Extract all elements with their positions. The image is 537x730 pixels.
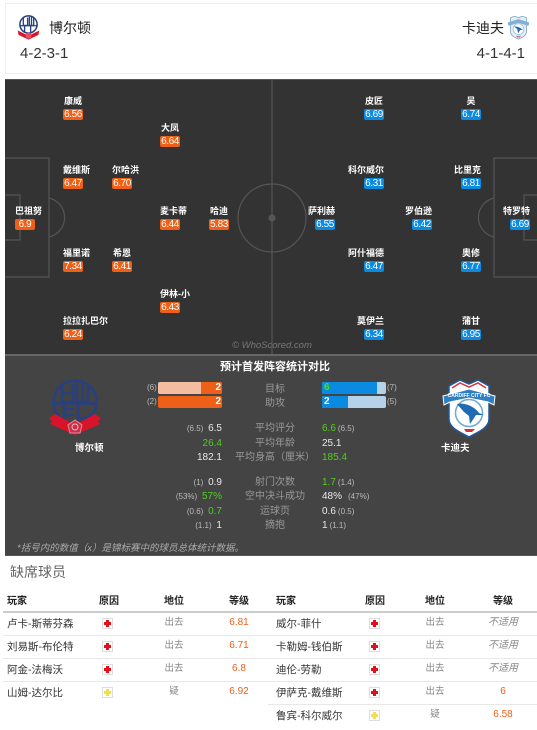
row: 卢卡-斯蒂芬森: 卢卡-斯蒂芬森 — [7, 618, 74, 630]
bar totals: (5) — [387, 397, 397, 406]
row: 卢卡-斯蒂芬森: 6.81 — [229, 617, 249, 628]
player: 哈迪 — [209, 206, 229, 230]
player: 吴 — [461, 96, 481, 120]
player: 特罗特: 6.69 — [511, 219, 529, 230]
label: 空中决斗成功: 空中决斗成功 — [245, 491, 305, 502]
player: 阿什福德 — [348, 248, 384, 272]
panel: match header — [5, 3, 537, 74]
player: 大凤: 6.64 — [161, 136, 179, 147]
header: rating: 等级 — [229, 596, 249, 607]
row: 迪伦-劳勒: 不适用 — [488, 663, 518, 674]
player: 莫伊兰: 莫伊兰 — [357, 316, 384, 326]
player: 罗伯逊: 罗伯逊 — [405, 206, 432, 216]
label: 助攻: 助攻 — [265, 398, 285, 409]
stats heading: 预计首发阵容统计对比 — [220, 361, 330, 373]
player: 罗伯逊: 6.42 — [413, 219, 431, 230]
row: 卡勒姆-钱伯斯: 不适用 — [488, 640, 518, 651]
header: player: 玩家 — [276, 596, 296, 607]
player: 特罗特 — [503, 206, 530, 230]
bar totals: (2) — [147, 397, 157, 406]
player: 皮匠: 6.69 — [365, 109, 383, 120]
value: height: 185.4 — [322, 452, 347, 463]
player: 戴维斯: 戴维斯 — [63, 165, 90, 175]
player: 蒲甘: 蒲甘 — [462, 316, 480, 326]
header: status: 地位 — [425, 596, 445, 607]
label: 运球页: 运球页 — [260, 506, 290, 517]
player: 希恩 — [112, 248, 132, 272]
bar: Bolton assists — [158, 396, 222, 408]
row: 刘易斯-布伦特: 刘易斯-布伦特 — [7, 641, 74, 653]
value: tackles: 1(1.1) — [322, 520, 346, 531]
player: 阿什福德: 6.47 — [365, 261, 383, 272]
player: 比里克: 6.81 — [462, 178, 480, 189]
bar fill — [322, 396, 348, 408]
row: 刘易斯-布伦特: 出去 — [164, 640, 184, 651]
row: 鲁宾-科尔威尔: 6.58 — [493, 709, 513, 720]
value: aerial: 48% (47%) — [322, 491, 369, 502]
row: 卡勒姆-钱伯斯 — [268, 640, 537, 658]
bar totals: (7) — [387, 383, 397, 392]
value: age: 26.4 — [203, 438, 222, 449]
player: 巴祖努 — [15, 206, 42, 230]
player: 大凤: 大凤 — [161, 123, 179, 133]
player: 奥修: 6.77 — [462, 261, 480, 272]
section heading: missing players: 缺席球员 — [10, 564, 66, 580]
player: 萨利赫 — [308, 206, 335, 230]
row: 威尔-菲什: 不适用 — [488, 617, 518, 628]
bar fill — [322, 382, 377, 394]
team name: Cardiff: 卡迪夫 — [462, 20, 504, 36]
icon: Bolton crest large — [49, 379, 101, 435]
player: 麦卡蒂: 6.44 — [161, 219, 179, 230]
player: 戴维斯: 6.47 — [64, 178, 82, 189]
row: 鲁宾-科尔威尔: 疑 — [430, 709, 440, 720]
row: 伊萨克-戴维斯: 6 — [500, 686, 506, 697]
player: 萨利赫: 6.55 — [316, 219, 334, 230]
formation: Bolton: 4-2-3-1 — [20, 45, 68, 62]
Bolton name: 博尔顿 — [75, 443, 104, 454]
player: 吴: 6.74 — [462, 109, 480, 120]
label: 摘抱: 摘抱 — [265, 520, 285, 531]
player: 特罗特: 特罗特 — [503, 206, 530, 216]
player: 尔哈洪 — [112, 165, 139, 189]
player: 巴祖努: 6.9 — [19, 219, 31, 230]
Bolton stat values — [176, 423, 222, 531]
header: player: 玩家 — [7, 596, 27, 607]
table: Bolton missing players — [0, 0, 268, 730]
row: 迪伦-劳勒: 迪伦-劳勒 — [276, 664, 322, 676]
player: 莫伊兰: 6.34 — [365, 329, 383, 340]
player: 麦卡蒂: 麦卡蒂 — [160, 206, 187, 216]
player: 尔哈洪: 尔哈洪 — [112, 165, 139, 175]
label: 平均年龄: 平均年龄 — [255, 438, 295, 449]
row: 威尔-菲什 — [268, 617, 537, 635]
row: 山姆-达尔比: 山姆-达尔比 — [7, 687, 63, 699]
icon: Bolton crest small — [18, 15, 40, 40]
bar totals: (6) — [147, 383, 157, 392]
player: 比里克 — [454, 165, 481, 189]
panel: pitch — [5, 79, 537, 354]
stat labels — [235, 383, 315, 531]
player: 科尔威尔: 6.31 — [365, 178, 383, 189]
value: shots: 1.7(1.4) — [322, 477, 354, 488]
row: 山姆-达尔比: 疑 — [169, 686, 179, 697]
row: 迪伦-劳勒 — [268, 663, 537, 681]
player: 尔哈洪: 6.70 — [113, 178, 131, 189]
player: 福里诺 — [63, 248, 90, 272]
player: 蒲甘: 6.95 — [462, 329, 480, 340]
watermark: © WhoScored.com — [232, 340, 312, 351]
player: 莫伊兰 — [357, 316, 384, 340]
players: Bolton — [15, 96, 229, 340]
value: aerial: (53%) 57% — [176, 491, 222, 502]
header: reason: 原因 — [99, 596, 119, 607]
footnote: *括号内的数值（x）是锦标赛中的球员总体统计数据。 — [17, 543, 244, 554]
header: status: 地位 — [164, 596, 184, 607]
formation: Cardiff: 4-1-4-1 — [477, 45, 525, 62]
players: Cardiff — [308, 96, 530, 340]
label: 平均身高: 平均身高（厘米） — [235, 452, 315, 463]
Cardiff name: 卡迪夫 — [441, 443, 470, 454]
row: 刘易斯-布伦特 — [0, 640, 268, 658]
player: 福里诺: 7.34 — [64, 261, 82, 272]
team name: Bolton: 博尔顿 — [49, 20, 91, 36]
value: age: 25.1 — [322, 438, 341, 449]
player: 阿什福德: 阿什福德 — [348, 248, 384, 258]
row: 阿金-法梅沃 — [0, 663, 268, 681]
row: 卡勒姆-钱伯斯: 出去 — [425, 640, 445, 651]
player: 科尔威尔: 科尔威尔 — [348, 165, 384, 175]
player: 皮匠: 皮匠 — [365, 96, 383, 106]
player: 康威: 6.56 — [64, 109, 82, 120]
table: Cardiff missing players — [268, 0, 537, 730]
player: 比里克: 比里克 — [454, 165, 481, 175]
player: 皮匠 — [364, 96, 384, 120]
player: 康威 — [63, 96, 83, 120]
player: 伊林-小: 6.43 — [161, 302, 179, 313]
player: 哈迪: 5.83 — [210, 219, 228, 230]
value: shots: (1) 0.9 — [194, 477, 222, 488]
player: 戴维斯 — [63, 165, 90, 189]
value: height: 182.1 — [197, 452, 222, 463]
row: 鲁宾-科尔威尔: 鲁宾-科尔威尔 — [276, 710, 342, 722]
row: 山姆-达尔比: 6.92 — [229, 686, 249, 697]
label: 目标: 目标 — [265, 384, 285, 395]
icon: Cardiff crest small — [508, 16, 530, 40]
player: 福里诺: 福里诺 — [63, 248, 90, 258]
player: 拉拉扎巴尔: 6.24 — [64, 329, 82, 340]
row: 卢卡-斯蒂芬森: 出去 — [164, 617, 184, 628]
row: 阿金-法梅沃: 6.8 — [232, 663, 246, 674]
Cardiff stat values — [322, 423, 369, 531]
row: 卡勒姆-钱伯斯: 卡勒姆-钱伯斯 — [276, 641, 342, 653]
bar fill: 6 — [324, 382, 330, 393]
player: 大凤 — [160, 123, 180, 147]
bar totals — [147, 383, 397, 406]
panel: lineup stats comparison — [5, 354, 537, 556]
player: 麦卡蒂 — [160, 206, 187, 230]
player: 康威: 康威 — [64, 96, 82, 106]
value: rating: 6.6(6.5) — [322, 423, 354, 434]
player: 拉拉扎巴尔: 拉拉扎巴尔 — [63, 316, 108, 326]
row: 迪伦-劳勒: 出去 — [425, 663, 445, 674]
label: 射门次数: 射门次数 — [255, 477, 295, 488]
row: 伊萨克-戴维斯: 伊萨克-戴维斯 — [276, 687, 342, 699]
bar: Bolton assists: 2 — [215, 396, 221, 407]
row: 伊萨克-戴维斯: 出去 — [425, 686, 445, 697]
row: 威尔-菲什: 出去 — [425, 617, 445, 628]
player: 巴祖努: 巴祖努 — [15, 206, 42, 216]
row: 阿金-法梅沃: 阿金-法梅沃 — [7, 664, 63, 676]
player: 伊林-小: 伊林-小 — [160, 289, 190, 299]
icon: Cardiff crest large — [442, 379, 496, 438]
row: 鲁宾-科尔威尔 — [268, 709, 537, 727]
icon: Cardiff crest large: CARDIFF CITY FC — [448, 393, 491, 399]
row: 阿金-法梅沃: 出去 — [164, 663, 184, 674]
player: 拉拉扎巴尔 — [63, 316, 108, 340]
row: 威尔-菲什: 威尔-菲什 — [276, 618, 322, 630]
player: 奥修 — [461, 248, 481, 272]
row: 刘易斯-布伦特: 6.71 — [229, 640, 249, 651]
player: 蒲甘 — [461, 316, 481, 340]
player: 伊林-小 — [160, 289, 190, 313]
player: 希恩: 6.41 — [113, 261, 131, 272]
row: 伊萨克-戴维斯 — [268, 686, 537, 704]
player: 科尔威尔 — [348, 165, 384, 189]
player: 奥修: 奥修 — [462, 248, 480, 258]
header: rating: 等级 — [493, 596, 513, 607]
bar: Cardiff assists — [322, 396, 386, 408]
value: rating: (6.5) 6.5 — [187, 423, 222, 434]
bar fill: 2 — [215, 382, 221, 393]
pitch lines — [5, 80, 537, 354]
player: 希恩: 希恩 — [113, 248, 131, 258]
header: reason: 原因 — [365, 596, 385, 607]
value: tackles: (1.1) 1 — [195, 520, 222, 531]
player: 吴: 吴 — [466, 96, 476, 106]
bar: Cardiff goals — [322, 382, 386, 394]
player: 萨利赫: 萨利赫 — [308, 206, 335, 216]
player: 罗伯逊 — [405, 206, 432, 230]
value: dribbles: 0.6(0.5) — [322, 506, 354, 517]
player: 哈迪: 哈迪 — [210, 206, 228, 216]
row: 山姆-达尔比 — [0, 686, 268, 704]
label: 平均评分: 平均评分 — [255, 423, 295, 434]
value: dribbles: (0.6) 0.7 — [187, 506, 222, 517]
bar fill — [201, 382, 222, 394]
row: 卢卡-斯蒂芬森 — [0, 617, 268, 635]
bar fill: 2 — [324, 396, 330, 407]
bar: Bolton goals — [158, 382, 222, 394]
